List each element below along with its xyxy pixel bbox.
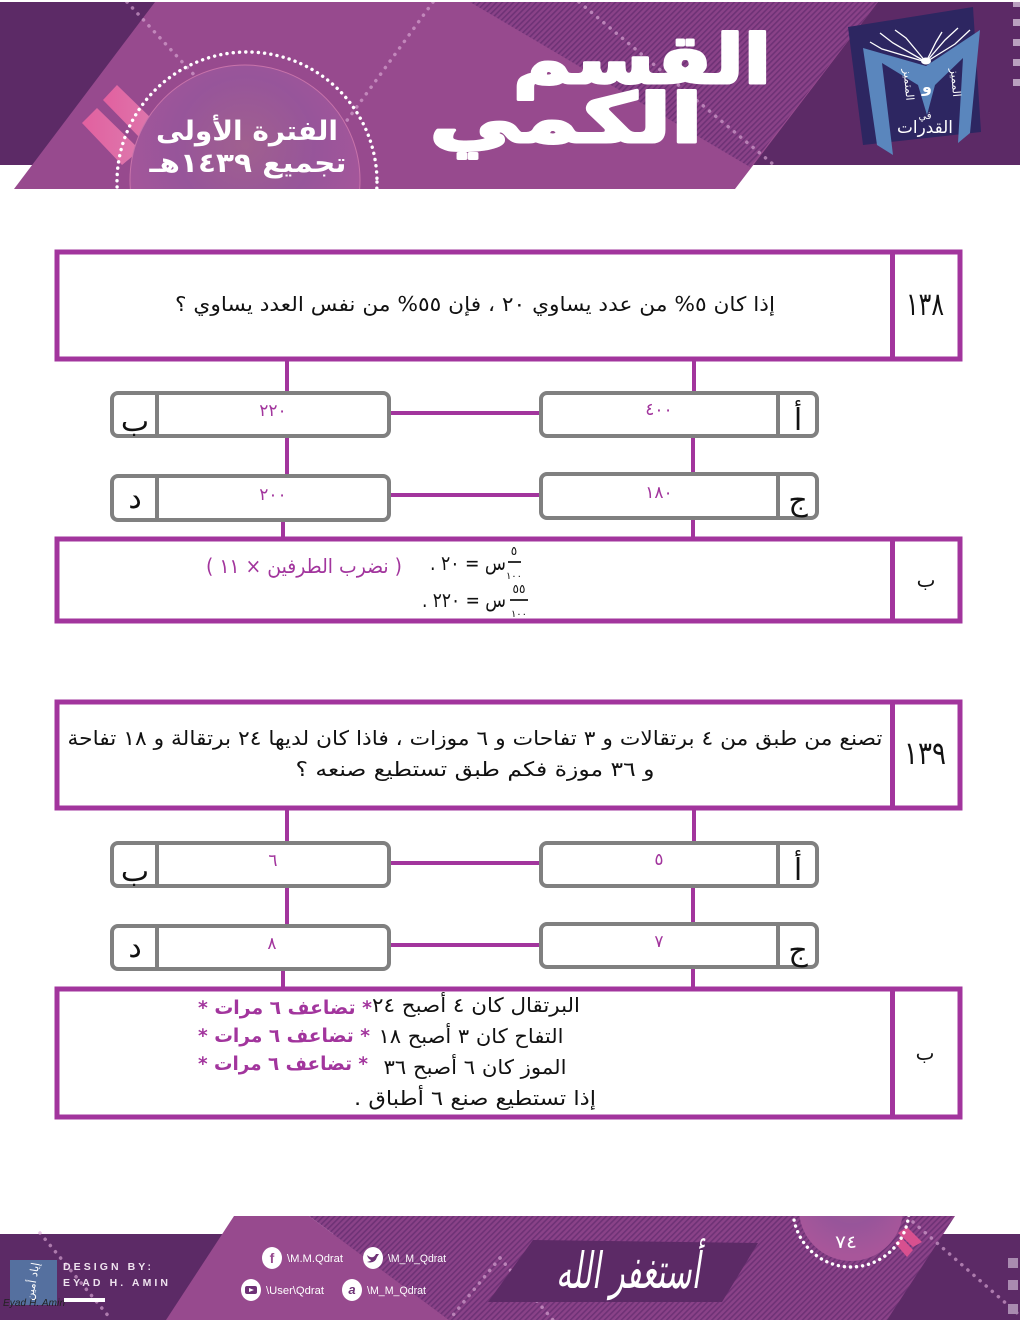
option d xyxy=(112,926,389,969)
designer credit xyxy=(63,1261,168,1302)
explanation panel: س = ٢٠ . xyxy=(430,551,506,575)
question panel: ١٣٩ xyxy=(904,734,946,772)
footer banner xyxy=(0,1216,1020,1320)
medium parallelogram xyxy=(166,1216,449,1320)
social: facebook xyxy=(262,1247,343,1269)
explanation panel: * تضاعف ٦ مرات * xyxy=(198,1025,370,1047)
dotted diagonal lines xyxy=(125,2,774,165)
option d: ٢٠٠ xyxy=(259,485,287,505)
option d: ٨ xyxy=(267,934,277,954)
option c: ٧ xyxy=(654,932,664,952)
explanation panel: ٥٥ xyxy=(513,582,525,596)
social: facebook: \M.M.Qdrat xyxy=(287,1253,343,1265)
option a xyxy=(541,843,817,888)
connectors xyxy=(281,358,696,538)
explanation panel: ٥ xyxy=(511,544,517,558)
subtitle: period: الفترة الأولى xyxy=(156,114,338,147)
title line 1: القسم xyxy=(513,21,771,100)
explanation panel: ( نضرب الطرفين × ١١ ) xyxy=(206,554,402,578)
logo: و xyxy=(921,77,932,96)
subtitle: compilation year: تجميع ١٤٣٩هـ xyxy=(148,148,346,179)
header banner xyxy=(0,2,1020,189)
option a: أ xyxy=(794,399,802,438)
central parallelogram xyxy=(14,2,878,189)
question panel xyxy=(57,252,960,359)
option d xyxy=(112,476,389,520)
title line 2: الكمي xyxy=(430,80,702,159)
circle badge xyxy=(115,50,379,189)
option b: ب xyxy=(121,404,149,439)
logo: المتميز xyxy=(901,67,916,101)
option b xyxy=(112,843,389,889)
hatched area xyxy=(309,1216,955,1320)
calligraphy plate: أستغفر الله xyxy=(556,1238,706,1301)
question 139 block xyxy=(57,702,960,1117)
explanation panel: الموز كان ٦ أصبح ٣٦ xyxy=(384,1054,566,1079)
option a: ٥ xyxy=(654,850,664,870)
pink stripes xyxy=(82,85,155,165)
option c: ج xyxy=(788,483,808,518)
social: youtube: \User\Qdrat xyxy=(266,1285,324,1297)
option c xyxy=(541,474,817,518)
option b xyxy=(112,393,389,439)
side squares xyxy=(1008,1258,1018,1314)
explanation panel xyxy=(57,989,960,1117)
calligraphy plate xyxy=(488,1238,758,1302)
explanation panel: ١٠٠ xyxy=(506,571,522,582)
logo: المميز xyxy=(948,67,963,97)
hatched triangle xyxy=(470,2,878,167)
option a: ٤٠٠ xyxy=(645,400,673,420)
explanation panel: التفاح كان ٣ أصبح ١٨ xyxy=(379,1023,564,1048)
social: instagram xyxy=(342,1279,426,1301)
social: instagram: \M_M_Qdrat xyxy=(367,1285,426,1297)
social: youtube xyxy=(241,1279,324,1301)
option c: ج xyxy=(788,933,808,968)
explanation panel: ١٠٠ xyxy=(511,609,527,620)
question 138 block xyxy=(57,252,960,621)
social: facebook: f xyxy=(270,1250,275,1266)
option a xyxy=(541,393,817,438)
logo: القدرات xyxy=(897,118,953,138)
question panel: و ٣٦ موزة فكم طبق تستطيع صنعه ؟ xyxy=(296,757,654,781)
logo: في xyxy=(918,111,932,122)
explanation panel: البرتقال كان ٤ أصبح ٢٤ xyxy=(372,992,580,1017)
explanation panel: * تضاعف ٦ مرات * xyxy=(198,1053,368,1075)
pink stripes xyxy=(895,1227,922,1257)
question panel xyxy=(57,702,960,808)
page number badge: ٧٤ xyxy=(835,1232,857,1253)
dotted lines xyxy=(40,1222,1017,1320)
social: instagram: a xyxy=(348,1282,356,1297)
option b: ٢٢٠ xyxy=(259,401,287,421)
question panel: إذا كان ٥% من عدد يساوي ٢٠ ، فإن ٥٥% من نفس العدد يساوي ؟ xyxy=(175,292,775,317)
explanation panel: ب xyxy=(917,568,935,592)
question panel: ١٣٨ xyxy=(906,285,944,323)
social: twitter: \M_M_Qdrat xyxy=(388,1253,446,1265)
connectors xyxy=(281,808,696,988)
explanation panel: ب xyxy=(916,1041,934,1065)
designer logo xyxy=(3,1260,65,1309)
side squares xyxy=(1013,0,1020,86)
social: twitter xyxy=(363,1247,446,1269)
logo xyxy=(848,7,981,155)
option a: أ xyxy=(794,849,802,888)
option d: د xyxy=(128,481,142,516)
option d: د xyxy=(128,930,142,965)
designer credit: DESIGN BY: xyxy=(63,1261,151,1273)
explanation panel xyxy=(57,539,960,621)
explanation panel: * تضاعف ٦ مرات * xyxy=(198,997,372,1019)
explanation panel: إذا تستطيع صنع ٦ أطباق . xyxy=(354,1085,596,1111)
option b: ٦ xyxy=(268,851,278,871)
option b: ب xyxy=(121,854,149,889)
explanation panel: س = ٢٢٠ . xyxy=(422,588,506,612)
designer credit: EYAD H. AMIN xyxy=(63,1277,168,1289)
question panel: تصنع من طبق من ٤ برتقالات و ٣ تفاحات و ٦ موزات ، فاذا كان لديها ٢٤ برتقالة و ١٨ تفاحة xyxy=(68,726,882,750)
option c xyxy=(541,924,817,968)
designer logo: Eyad H. Amin xyxy=(3,1298,65,1309)
option c: ١٨٠ xyxy=(645,483,673,503)
designer logo: إياد أمين xyxy=(22,1261,42,1301)
page number badge xyxy=(792,1216,910,1269)
